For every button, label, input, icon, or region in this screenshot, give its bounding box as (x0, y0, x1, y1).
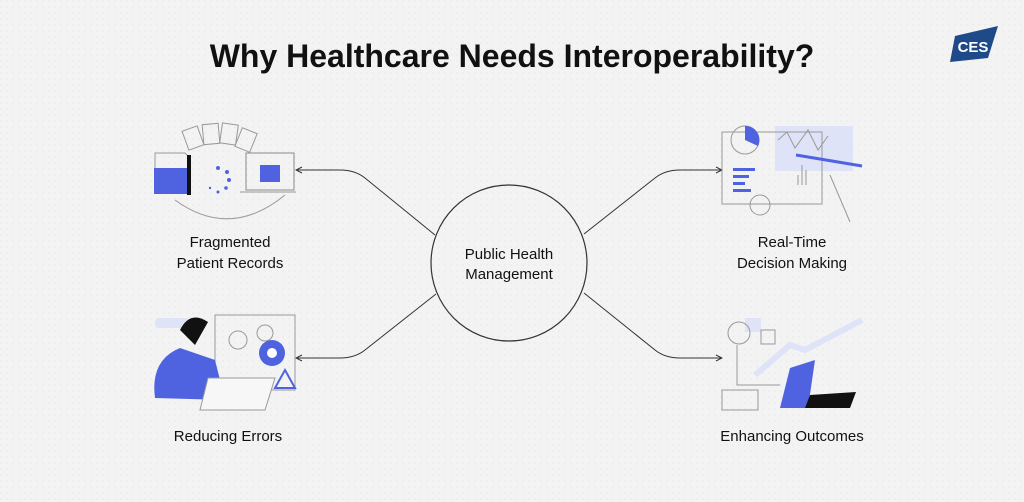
icon: reducing errors (154, 315, 295, 410)
label: real-time decision making (737, 234, 847, 272)
label: fragmented patient records (177, 234, 283, 272)
label: real-time decision making: Decision Making (737, 255, 847, 272)
icon: enhancing outcomes (722, 318, 862, 410)
arrow: to reducing errors (296, 294, 436, 358)
arrow: to enhancing outcomes (584, 293, 722, 358)
center circle: Public Health Management: Public Health (465, 246, 553, 263)
label: real-time decision making: Real-Time (758, 234, 826, 251)
icon: fragmented records (154, 123, 296, 219)
arrow: to real-time decision (584, 170, 722, 234)
title: Why Healthcare Needs Interoperability? (210, 38, 814, 74)
center circle: Public Health Management: Management (465, 266, 554, 283)
center circle: Public Health Management (431, 185, 587, 341)
icon: real-time decision making (722, 126, 862, 222)
arrow: to fragmented records (296, 170, 435, 235)
logo: CES: CES (958, 39, 988, 56)
label: fragmented patient records: Fragmented (190, 234, 270, 251)
logo: CES (950, 26, 998, 62)
label: reducing errors: Reducing Errors (174, 428, 282, 445)
label: enhancing outcomes: Enhancing Outcomes (720, 428, 864, 445)
label: fragmented patient records: Patient Records (177, 255, 283, 272)
